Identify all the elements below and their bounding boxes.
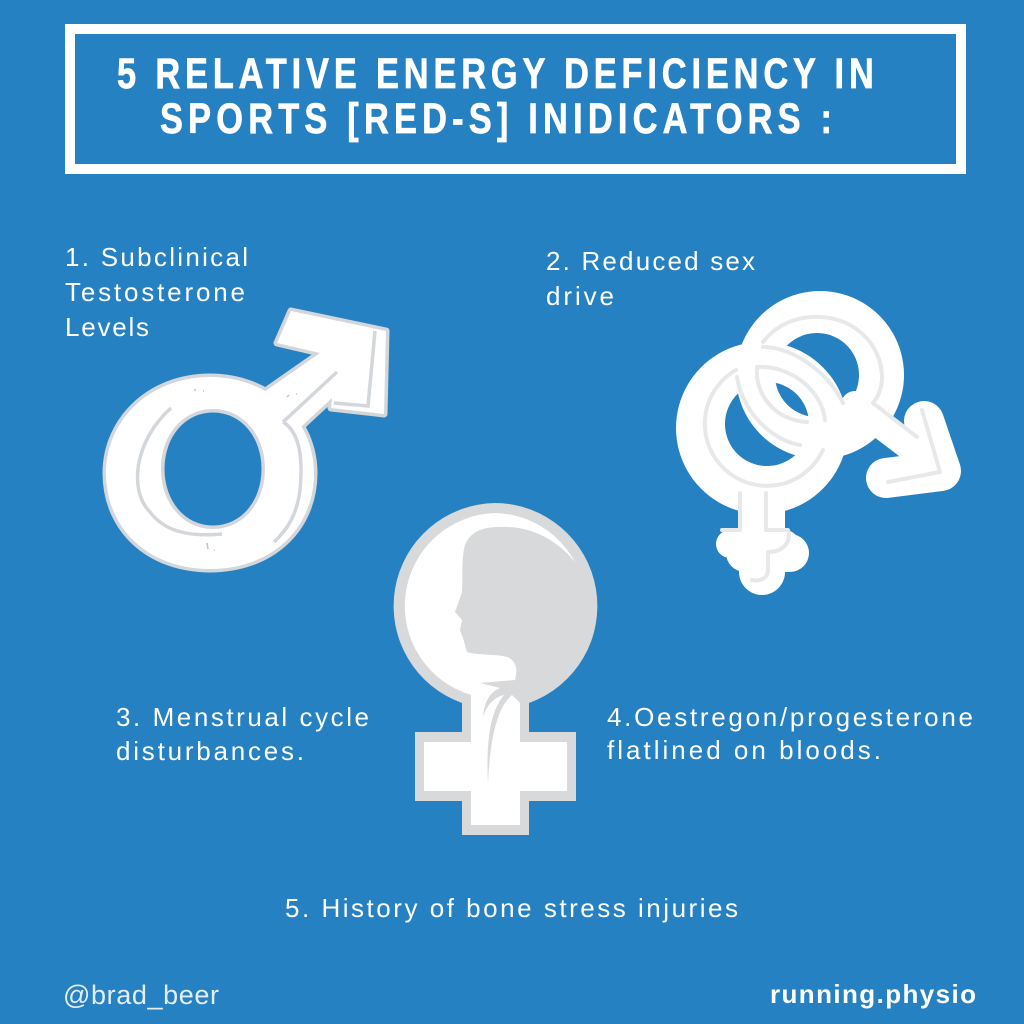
indicator 3 text: 3. Menstrual cycle <box>116 702 369 732</box>
indicator 3 text <box>116 702 369 766</box>
title panel: 5 RELATIVE ENERGY DEFICIENCY IN <box>117 50 874 98</box>
author handle: @brad_beer <box>63 980 219 1010</box>
indicator 4 text: flatlined on bloods. <box>607 735 881 765</box>
indicator 2 text <box>546 246 755 311</box>
icon: male symbol <box>106 311 386 569</box>
title panel: SPORTS [RED-S] INIDICATORS : <box>160 95 832 143</box>
indicator 5 text: 5. History of bone stress injuries <box>285 893 738 923</box>
indicator 1 text <box>65 242 248 342</box>
indicator 4 text: 4.Oestregon/progesterone <box>607 702 973 732</box>
indicator 2 text: 2. Reduced sex <box>546 246 755 276</box>
indicator 1 text: 1. Subclinical <box>65 242 248 272</box>
indicator 1 text: Testosterone <box>65 277 245 307</box>
indicator 4 text <box>607 702 973 765</box>
indicator 2 text: drive <box>546 281 614 311</box>
icon: interlocked female and male symbols <box>676 291 943 581</box>
woman silhouette <box>455 527 596 785</box>
indicator 3 text: disturbances. <box>116 736 304 766</box>
indicator 1 text: Levels <box>65 312 149 342</box>
title panel <box>70 29 961 169</box>
website: running.physio <box>770 979 976 1009</box>
icon: female symbol with woman silhouette <box>394 503 597 835</box>
